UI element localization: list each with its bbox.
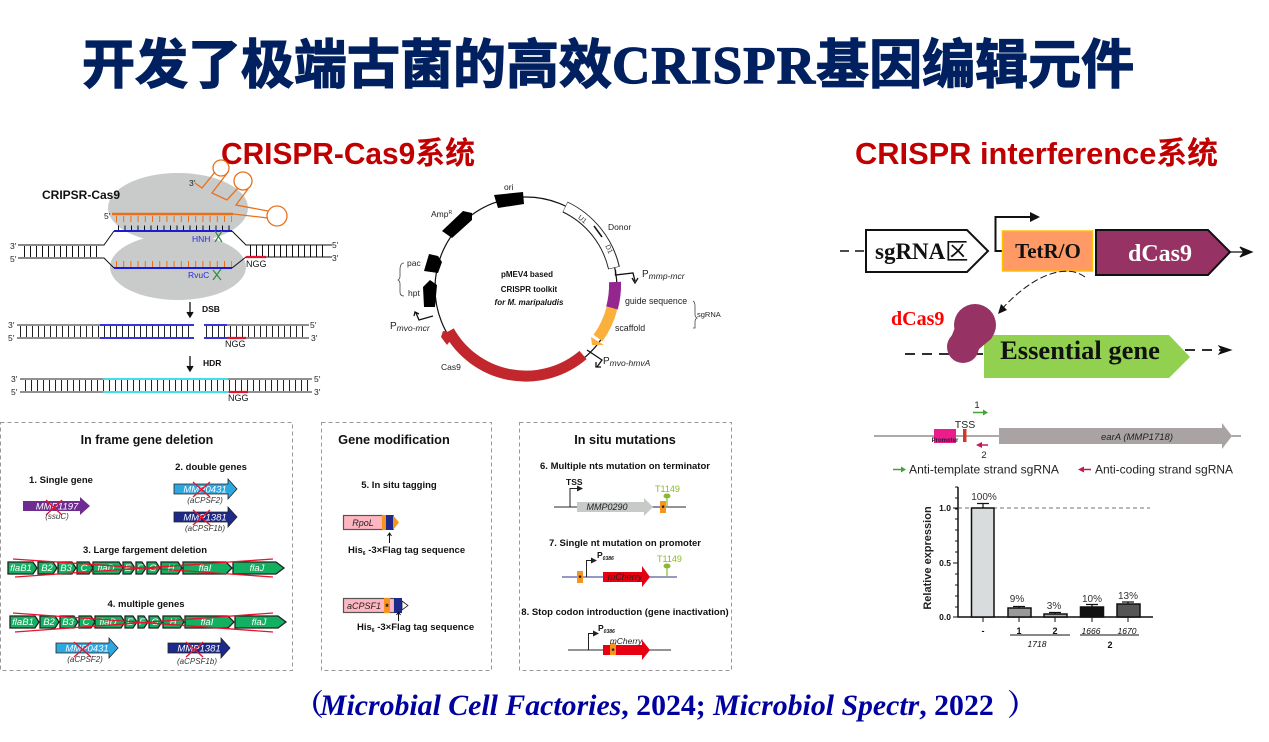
item 3: large fragment deletion: 3. Large fargement deletion [83,545,207,556]
item 4: multiple genes: E [127,617,134,628]
x ticks [983,617,1139,635]
item 3: large fragment deletion: F [137,563,144,574]
strand end labels: 5′ [314,374,321,384]
x labels: 1666 [1082,626,1101,636]
item heading: in situ tagging: 5. In situ tagging [361,480,437,491]
construct: RpoL tag: 6 [363,551,366,557]
item 4: multiple genes: H [170,617,177,628]
item 7: promoter mutation: mCherry [608,572,643,582]
strand end labels: 5′ [10,254,17,264]
dCas9 gene [1096,230,1230,275]
bars [972,508,1140,617]
promoter arrow [996,212,1040,251]
strand end labels: 5′ [332,240,339,250]
x labels: 1 [1016,626,1022,636]
sgRNA 1 arrow: 1 [974,400,980,411]
sgRNA region: sgRNA区 [875,232,968,266]
strand end labels: 3′ [10,241,17,251]
plasmid centre text: CRISPR toolkit [501,285,558,294]
plasmid labels: hpt [408,288,420,298]
value labels: 100% [971,492,997,503]
construct: aCPSF1 tag: 6 [372,628,375,634]
plasmid labels: ori [504,182,514,192]
plasmid labels: pac [407,258,421,268]
strand end labels: 3′ [311,333,318,343]
panel: in frame gene deletion [0,422,292,670]
x labels: 1670 [1118,626,1137,636]
plasmid labels: Cas9 [441,362,461,372]
item 6: terminator mutation: MMP0290 [586,502,628,512]
construct: aCPSF1 tag: * [385,602,389,612]
y axis title: Relative expression [922,506,934,610]
panel border [322,422,492,670]
legend: Anti-coding strand sgRNA [1095,462,1233,476]
strand end labels [8,178,339,397]
earA gene arrow [999,423,1232,449]
item 4: multiple genes: flaI [201,617,214,628]
promoter box [932,429,959,444]
3' arrow line [1230,247,1252,257]
item 4: multiple genes: flaB1 [12,617,34,628]
AmpR block [442,211,472,238]
plasmid labels: mvo-mcr [397,323,431,333]
item 6: terminator mutation: T1149 [655,484,680,494]
item 2: double genes [174,462,247,533]
item 4: multiple genes: C [83,617,90,628]
plasmid labels: scaffold [615,323,645,333]
earA gene arrow: earA (MMP1718) [1101,432,1173,443]
item 8: stop codon: P [598,623,604,633]
citation: ） [1007,681,1037,724]
item 2: double genes: (aCPSF2) [187,496,223,505]
diagram: CRISPRi construct [840,212,1252,378]
y tick labels: 0.5 [939,558,951,568]
arrow: HDR step [187,356,193,371]
plasmid labels: mmp-mcr [649,271,686,281]
construct: RpoL tag: His [348,545,363,556]
item 3: large fragment deletion: C [81,563,88,574]
strand end labels: 3′ [314,387,321,397]
y tick labels: 1.0 [939,503,951,513]
heading: CRISPR interference system: CRISPR interference系统 [855,136,1218,171]
label: NGG top: NGG [246,259,267,269]
construct: RpoL tag [344,515,465,557]
y tick labels: 0.0 [939,612,951,622]
locus line [874,435,1241,437]
panel heading: In frame gene deletion [81,433,213,447]
diagram: earA locus [874,400,1241,476]
value labels [971,492,1138,612]
label: NGG HDR: NGG [228,393,249,403]
plasmid labels: R [448,210,452,216]
backbone circle [435,197,617,379]
nuclease labels: RvuC [188,270,209,280]
guide RNA [112,160,287,264]
TSS mark [955,419,975,442]
item 2: double genes: (aCPSF1b) [185,524,225,533]
item 1: single gene [23,475,93,521]
plasmid labels: Donor [608,222,631,232]
strand end labels: 3′ [11,374,18,384]
item 3: large fragment deletion: flaI [199,563,212,574]
dCas9 gene: dCas9 [1128,241,1192,267]
strand end labels: 5′ [8,333,15,343]
strand end labels: 5′ [104,211,111,221]
panel heading: Gene modification [338,432,450,447]
plasmid labels: P [642,269,649,280]
sgRNA region [866,230,988,272]
panel heading: In situ mutations [574,433,676,447]
item 3: large fragment deletion: flaJ [250,563,265,574]
item 6: terminator mutation: TSS [566,477,583,487]
panel: in situ mutations [520,422,732,670]
item 7: promoter mutation: 0386 [603,556,614,562]
item 7: promoter mutation: * [578,574,582,583]
item 4: multiple genes: 4. multiple genes [107,599,185,610]
dashed DNA lines [840,250,866,252]
diagram: Cas9 DSB and HDR mechanism [8,160,339,403]
plasmid labels: P [603,356,610,367]
bar chart: relative expression [922,487,1153,650]
item 3: large fragment deletion: G [149,563,157,574]
item 4: multiple genes: G [151,617,159,628]
item 2: double genes: MMP1381 [183,512,227,524]
item 4: multiple genes: MMP1381 [177,644,221,654]
panel border [520,422,732,670]
value labels: 13% [1118,591,1138,602]
Essential gene [984,335,1190,378]
label: dCas9: dCas9 [891,308,944,330]
plasmid centre text [495,270,564,307]
pac block [424,254,442,273]
item 2: double genes: MMP0431 [183,484,227,496]
Cas9 protein lobes [108,173,248,300]
DNA strands at target site [18,228,332,268]
arrow: DSB step [187,302,193,317]
plasmid labels: Amp [431,209,448,219]
scissors icons [213,231,222,280]
scaffold arrow [591,308,612,345]
construct: aCPSF1 tag [344,598,474,634]
x labels: - [982,626,984,636]
item 8: stop codon: * [611,647,615,656]
plasmid labels: P [390,321,397,332]
Essential gene: Essential gene [1000,335,1160,365]
plasmid labels: mvo-hmvA [610,358,651,368]
guide sequence segment [612,282,615,308]
item 4: multiple genes: flaJ [252,617,267,628]
strand end labels: 5′ [310,320,317,330]
reference line [958,507,1150,509]
citation: （ [294,681,324,724]
item 1: single gene: MMP1197 [36,502,79,512]
y tick labels [939,503,951,622]
item 6: terminator mutation: 6. Multiple nts mutation on terminator [540,461,710,472]
plasmid map: pMEV4 toolkit [390,182,721,379]
citation: Microbial Cell Factories [319,689,621,722]
item 4: multiple genes: (aCPSF2) [67,655,103,664]
citation: , 2024; Microbiol Spectr, 2022 [621,689,994,722]
plasmid labels: sgRNA [697,310,721,319]
item 3: large fragment deletion: B3 [60,563,73,574]
item 7: promoter mutation [549,538,701,587]
plasmid centre text: for M. maripaludis [495,298,564,307]
y ticks [953,487,958,617]
item 3: large fragment deletion: flaD [98,563,115,574]
item 3: large fragment deletion: B2 [41,563,54,574]
item 7: promoter mutation: 7. Single nt mutation on promoter [549,538,701,549]
arrow end [1219,346,1231,354]
item 7: promoter mutation: P [597,550,603,560]
ori block [494,192,524,208]
label: DSB: DSB [202,304,220,314]
item 8: stop codon: 0386 [604,629,615,635]
title: 开发了极端古菌的高效CRISPR基因编辑元件 [82,23,1134,99]
promoter box: Promoter [932,438,959,444]
x labels: 2 [1107,640,1113,650]
donor labels: U1 [576,214,588,225]
braces [398,263,697,328]
strand end labels: 5′ [11,387,18,397]
item 7: promoter mutation: T1149 [657,554,682,564]
item 1: single gene: 1. Single gene [29,475,93,486]
donor U1 and D1 [565,207,614,268]
label: HDR: HDR [203,358,221,368]
Cas9 arrow [441,331,583,376]
axes [958,487,1153,617]
item 3: large fragment deletion: flaB1 [10,563,32,574]
sgRNA 2 arrow [976,442,988,461]
TetR/O box [1002,231,1092,271]
item 4: multiple genes: flaD [100,617,117,628]
label: NGG DSB: NGG [225,339,246,349]
DSB DNA [17,325,309,338]
item 8: stop codon [521,607,729,660]
construct: aCPSF1 tag: aCPSF1 [347,601,381,611]
nuclease labels [188,234,210,280]
nuclease labels: HNH [192,234,210,244]
legend: Anti-template strand sgRNA [909,462,1060,476]
plasmid centre text: pMEV4 based [501,270,553,279]
value labels: 3% [1047,601,1061,612]
item 4: multiple genes: MMP0431 [65,644,109,654]
legend [893,462,1233,476]
HDR DNA [20,379,312,392]
item 2: double genes: 2. double genes [175,462,247,473]
value labels: 10% [1082,594,1102,605]
strand end labels: 3′ [8,320,15,330]
item 3: large fragment deletion: E [125,563,132,574]
panel: gene modification [322,422,492,670]
construct: RpoL tag: -3×Flag tag sequence [366,545,465,556]
strand end labels: 3′ [332,253,339,263]
item 8: stop codon: mCherry [610,636,643,646]
item 8: stop codon: 8. Stop codon introduction (gene inactivation) [521,607,729,618]
plasmid labels [390,182,721,372]
TSS mark: TSS [955,419,975,431]
dCas9 protein blob [947,304,996,363]
target dash lines [905,350,1222,354]
TetR/O box: TetR/O [1015,239,1081,263]
panel border [0,422,292,670]
plasmid labels: guide sequence [625,296,687,306]
label: CRIPSR-Cas9: CRIPSR-Cas9 [42,188,120,202]
heading: CRISPR-Cas9 system: CRISPR-Cas9系统 [221,136,475,171]
strand end labels: 3′ [189,178,196,188]
item 3: large fragment deletion: H [168,563,175,574]
dashed expression arrow [998,271,1085,314]
sgRNA 1 arrow [973,400,988,416]
sgRNA 2 arrow: 2 [981,450,987,461]
hpt block [423,280,437,307]
x labels: 2 [1052,626,1058,636]
x labels: 1718 [1028,639,1047,649]
item 4: multiple genes [10,599,286,666]
promoters [414,270,638,367]
item 6: terminator mutation: * [661,504,665,513]
item 3: large fragment deletion [8,545,284,577]
donor labels [576,214,613,255]
x labels [982,626,1137,650]
item 6: terminator mutation [540,461,710,516]
item 4: multiple genes: F [139,617,146,628]
item 4: multiple genes: (aCPSF1b) [177,657,217,666]
construct: aCPSF1 tag: His [357,622,372,633]
construct: aCPSF1 tag: -3×Flag tag sequence [375,622,474,633]
error bars [977,504,1134,614]
donor labels: D1 [603,244,613,255]
item 4: multiple genes: B3 [62,617,75,628]
construct: RpoL tag: RpoL [352,518,374,528]
value labels: 9% [1010,594,1024,605]
item 4: multiple genes: B2 [43,617,56,628]
item 1: single gene: (ssuC) [45,512,69,521]
